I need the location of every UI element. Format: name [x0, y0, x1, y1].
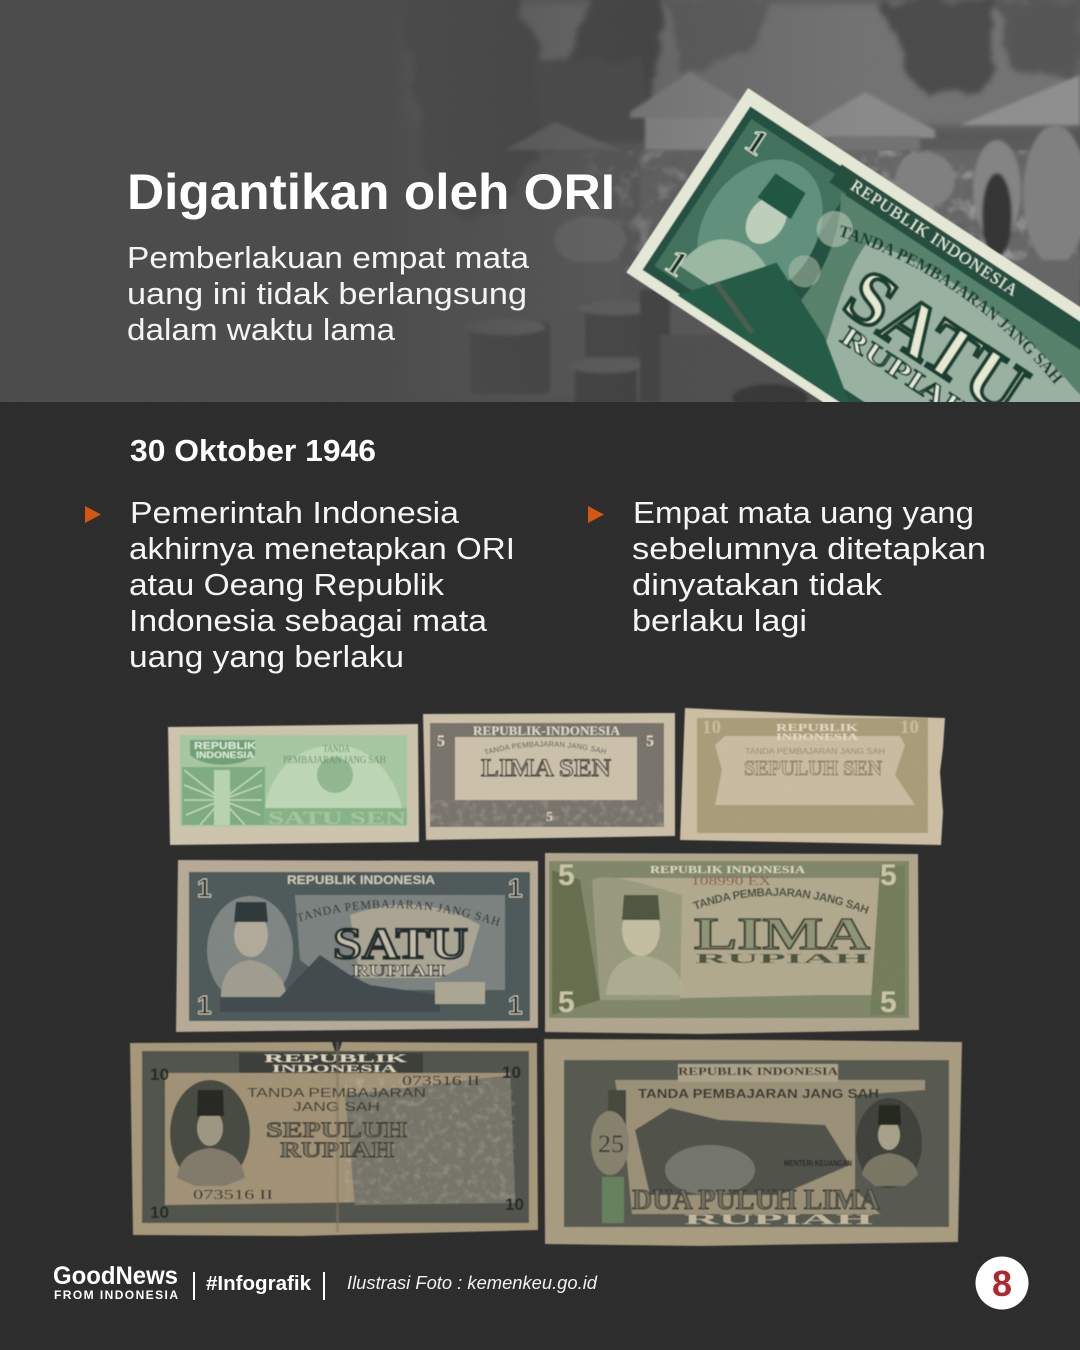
- footer: logo GoodNews from Indonesia: GoodNews: [53, 1262, 178, 1290]
- banknote: sepuluh rupiah: SEPULUH: [266, 1117, 407, 1142]
- banknote: lima rupiah: TANDA PEMBAJARAN JANG SAH: [692, 888, 870, 914]
- tilted green one rupiah banknote: [626, 88, 1080, 402]
- footer: photo credit: Ilustrasi Foto : kemenkeu.go.id: [347, 1273, 598, 1293]
- banknote: sepuluh sen: SEPULUH SEN: [744, 756, 882, 780]
- bullet: left text block: Indonesia sebagai mata: [129, 603, 488, 638]
- banknote: dua puluh lima rupiah: RUPIAH: [684, 1212, 874, 1228]
- banknote: satu rupiah: 1: [508, 873, 522, 903]
- banknote: lima sen: LIMA SEN: [481, 755, 611, 782]
- bullet: right text block: [588, 495, 986, 638]
- banknote: lima rupiah: 108990 EX: [691, 873, 772, 888]
- banknote: satu rupiah: 1: [197, 990, 211, 1020]
- banknote: lima rupiah: [544, 838, 928, 1035]
- banknote: sepuluh sen: 10: [900, 717, 919, 738]
- footer: logo GoodNews from Indonesia: [53, 1262, 178, 1302]
- banknote: sepuluh rupiah: 073516 II: [193, 1188, 273, 1203]
- icon: orange triangle bullet: [85, 506, 101, 523]
- bullet: right text block: Empat mata uang yang: [633, 495, 974, 530]
- banknote: lima rupiah: 5: [880, 859, 897, 892]
- page number badge: [976, 1256, 1028, 1310]
- banknote: lima rupiah: 5: [880, 986, 897, 1019]
- footer: hashtag: #Infografik: [206, 1273, 312, 1295]
- banknote: lima sen: 5: [646, 733, 654, 750]
- banknote: lima sen: [422, 712, 676, 841]
- banknote: satu rupiah: SATU: [333, 919, 468, 968]
- banknote: lima rupiah: 5: [558, 986, 575, 1019]
- banknote: dua puluh lima rupiah: [544, 1039, 962, 1246]
- banknote: dua puluh lima rupiah: TANDA PEMBAJARAN JANG SAH: [638, 1086, 879, 1101]
- bullet: left text block: akhirnya menetapkan ORI: [129, 531, 515, 566]
- banknote: sepuluh rupiah: [130, 1042, 538, 1236]
- banknote: lima sen: 5: [546, 810, 553, 825]
- subtitle text block: Pemberlakuan empat mata: [127, 240, 530, 275]
- tilted green one rupiah banknote: TANDA PEMBAJARAN JANG SAH: [840, 224, 1064, 385]
- banknote: sepuluh sen: 10: [702, 717, 721, 738]
- bullet: right text block: sebelumnya ditetapkan: [632, 531, 986, 566]
- banknote: dua puluh lima rupiah: DUA PULUH LIMA: [632, 1185, 881, 1216]
- banknote: sepuluh rupiah: 10: [505, 1195, 524, 1214]
- panel: header archival photo: [0, 0, 1080, 412]
- banknote: lima sen: 5: [437, 733, 445, 750]
- banknote: sepuluh rupiah: 10: [150, 1203, 169, 1222]
- icon: orange triangle bullet: [588, 506, 604, 523]
- tilted green one rupiah banknote: RUPIAH: [836, 321, 977, 428]
- banknote: sepuluh rupiah: 10: [150, 1065, 169, 1084]
- banknote: satu rupiah: [175, 838, 557, 1033]
- page number badge: 8: [992, 1263, 1012, 1304]
- banknote: sepuluh rupiah: RUPIAH: [280, 1137, 394, 1162]
- banknote: satu rupiah: 1: [197, 873, 211, 903]
- date heading: 30 Oktober 1946: [130, 433, 376, 468]
- bullet: left text block: [85, 495, 515, 674]
- banknote: sepuluh rupiah: INDONESIA: [272, 1063, 397, 1075]
- bullet: left text block: uang yang berlaku: [129, 639, 404, 674]
- tilted green one rupiah banknote: 1: [738, 120, 775, 163]
- banknote: lima rupiah: RUPIAH: [695, 952, 869, 967]
- banknote: satu sen: REPUBLIK: [194, 741, 257, 752]
- tilted green one rupiah banknote: 1: [659, 241, 696, 284]
- banknote: lima rupiah: LIMA: [694, 908, 870, 959]
- banknote: lima sen: REPUBLIK-INDONESIA: [473, 724, 620, 738]
- banknote: sepuluh sen: TANDA PEMBAJARAN JANG SAH: [745, 747, 885, 756]
- title: Digantikan oleh ORI: [127, 164, 615, 220]
- subtitle text block: [127, 240, 530, 347]
- bullet: right text block: berlaku lagi: [632, 603, 807, 638]
- banknote: lima rupiah: REPUBLIK INDONESIA: [650, 864, 805, 876]
- banknote: dua puluh lima rupiah: MENTERI KEUANGAN: [784, 1158, 852, 1168]
- tilted green one rupiah banknote: REPUBLIK INDONESIA: [847, 176, 1022, 300]
- bullet: left text block: Pemerintah Indonesia: [130, 495, 460, 530]
- banknote: satu rupiah: RUPIAH: [352, 961, 445, 980]
- banknote: lima rupiah: 5: [558, 859, 575, 892]
- banknote: sepuluh rupiah: 073516 II: [402, 1074, 480, 1089]
- banknote: lima sen: TANDA PEMBAJARAN JANG SAH: [484, 740, 606, 755]
- banknote: satu rupiah: TANDA PEMBAJARAN JANG SAH: [296, 900, 501, 926]
- banknote: satu rupiah: 1: [508, 990, 522, 1020]
- subtitle text block: uang ini tidak berlangsung: [127, 276, 527, 311]
- banknote: dua puluh lima rupiah: 25: [598, 1131, 624, 1158]
- subtitle text block: dalam waktu lama: [127, 312, 396, 347]
- bullet: right text block: dinyatakan tidak: [632, 567, 883, 602]
- banknote: satu sen: [168, 724, 419, 845]
- banknote: sepuluh sen: REPUBLIK: [776, 723, 859, 734]
- banknote: satu sen: PEMBAJARAN JANG SAH: [283, 755, 386, 766]
- banknote photo collection: [129, 707, 963, 1247]
- banknote: satu sen: TANDA: [323, 744, 351, 755]
- banknote: satu rupiah: REPUBLIK INDONESIA: [287, 875, 435, 887]
- footer: logo GoodNews from Indonesia: FROM INDONESIA: [54, 1288, 178, 1302]
- banknote: sepuluh rupiah: 10: [502, 1063, 521, 1082]
- banknote: sepuluh rupiah: JANG SAH: [293, 1100, 380, 1114]
- banknote: sepuluh sen: INDONESIA: [776, 732, 859, 742]
- banknote: sepuluh sen: [680, 708, 945, 845]
- banknote: dua puluh lima rupiah: REPUBLIK INDONESIA: [678, 1066, 839, 1078]
- tilted green one rupiah banknote: SATU: [830, 253, 1042, 432]
- banknote: sepuluh rupiah: REPUBLIK: [264, 1053, 407, 1065]
- banknote: sepuluh rupiah: TANDA PEMBAJARAN: [247, 1086, 426, 1100]
- banknote: satu sen: INDONESIA: [196, 750, 255, 760]
- banknote: satu sen: SATU SEN: [268, 808, 406, 828]
- bullet: left text block: atau Oeang Republik: [129, 567, 445, 602]
